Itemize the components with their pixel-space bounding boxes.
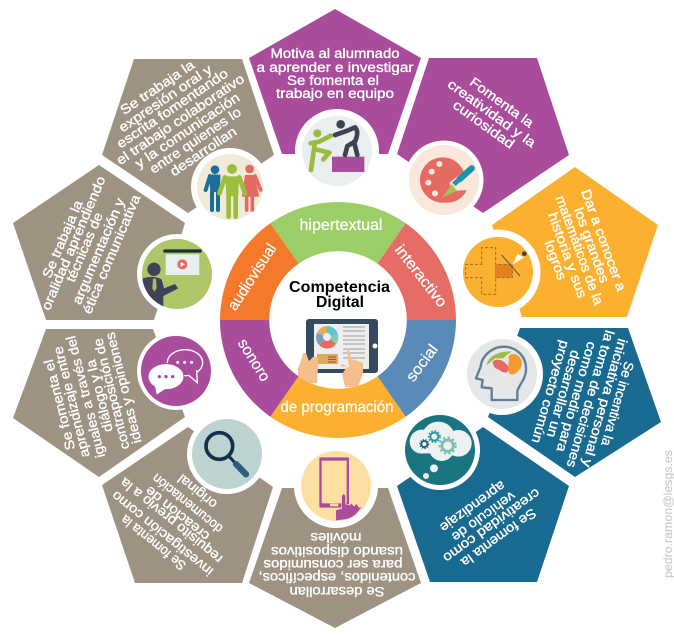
panel: matemáticos: matemáticos de la [553,194,606,307]
ring: digital dimensions: social [403,341,442,385]
panel: aprendizaje entre iguales: aprendizaje entre [50,345,93,459]
panel: matemáticos: los grandes [571,205,612,285]
icon: helping hand [295,109,379,193]
panel: investigación: documentación [149,471,225,537]
heading: Competencia Digital: Digital [316,294,364,311]
panel: creatividad aprendizaje: vehículo de [449,488,518,545]
panel: motiva al alumnado: Motiva al alumnado [270,46,400,61]
ring: digital dimensions: de programación [280,399,394,416]
panel: creatividad aprendizaje: creatividad como [440,485,543,566]
panel: oralidad: oralidad aprendiendo [38,174,108,312]
panel: iniciativa personal: iniciativa personal y [579,337,630,469]
panel: aprendizaje entre iguales: diálogo y la [83,358,116,434]
panel: oralidad [13,165,185,320]
panel: aprendizaje entre iguales: ideas y opiniones [102,330,145,445]
panel: iniciativa personal [488,328,661,477]
panel: aprendizaje entre iguales: contraposición de [90,337,133,451]
ring: digital dimensions: interactivo [391,242,450,311]
panel: matemáticos: Dar a conocer a [578,187,629,294]
icon: head with brain [461,333,543,415]
panel: motiva al alumnado [249,9,421,154]
panel: dispositivos móviles: para ser consumidos [263,557,402,572]
icon: tablet with hands [298,319,378,387]
panel: iniciativa personal: como medio para [553,340,599,454]
panel: creatividad y curiosidad: curiosidad [450,97,517,152]
panel: iniciativa personal: desarrollar un [544,349,583,439]
panel: iniciativa personal: proyecto común [529,339,572,445]
panel: dispositivos móviles: Se desarrollan [289,584,385,599]
ring: digital dimensions: audiovisual [225,241,280,314]
panel: oralidad: técnicas de [63,210,106,284]
icon: chat bubbles [137,332,215,410]
panel: creatividad aprendizaje [397,427,569,582]
panel: dispositivos móviles: contenidos, específicos, [258,570,416,585]
panel: investigación: original [175,471,220,512]
heading: Competencia Digital [289,279,390,311]
panel: iniciativa personal: la toma de decisiones [564,329,617,469]
panel: creatividad aprendizaje: Se fomenta la [458,505,539,570]
icon: presenter with screen [137,234,212,309]
ring: digital dimensions: hipertextual [300,217,382,234]
icon: palette [404,140,484,220]
panel: expresión oral y escrita: entre quienes lo [147,104,244,177]
panel: oralidad: Se trabaja la [39,198,86,280]
panel: motiva al alumnado: Se fomenta el [287,73,379,88]
panel: investigación: requisito previo a la [117,474,225,566]
icon: three people [191,148,269,226]
panel: expresión oral y escrita: expresión oral y [116,62,215,135]
panel: expresión oral y escrita: y la comunicación [132,90,242,171]
panel: investigación: creación de [142,483,212,544]
panel: motiva al alumnado: trabajo en equipo [276,86,394,101]
panel: investigación: Se fomenta la [118,512,189,573]
panel: oralidad: argumentación y [69,196,128,307]
panel: dispositivos móviles: móviles [310,530,362,545]
panel: matemáticos: historia y sus [545,210,590,300]
icon: magnifying glass [187,414,267,494]
panel: aprendizaje entre iguales [13,329,185,477]
panel: investigación: investigación como [109,488,216,579]
ring: digital dimensions [220,202,456,438]
panel: expresión oral y escrita [102,57,274,213]
panel: expresión oral y escrita: desarrollan [167,124,239,179]
icon: geometric construction [456,230,540,314]
ring: digital dimensions: sonoro [234,336,273,385]
panel: creatividad y curiosidad: creatividad y la [445,76,539,151]
panel: expresión oral y escrita: el trabajo colaborativo [113,71,247,168]
panel: investigación [102,427,273,583]
panel: dispositivos móviles: usando dispositivos [271,544,403,559]
panel: creatividad y curiosidad [397,58,569,213]
panel: creatividad aprendizaje: aprendizaje [437,478,508,535]
panel: motiva al alumnado: a aprender e investigar [256,60,414,75]
icon: smartphone and hand [294,444,378,528]
panel: matemáticos: logros [541,238,570,282]
panel: creatividad y curiosidad: Fomenta la [467,74,537,131]
panel: aprendizaje entre iguales: iguales a través del [63,334,108,459]
panel: iniciativa personal: Se incentiva la [598,360,637,448]
heading: Competencia Digital: Competencia [289,279,390,296]
panel: dispositivos móviles [249,488,421,628]
panel: expresión oral y escrita: escrita fomentando [114,66,231,151]
panel: oralidad: ética comunicativa [80,192,144,316]
icon: thought cloud with gears [400,410,480,490]
panel: expresión oral y escrita: Se trabaja la [117,57,198,118]
panel: aprendizaje entre iguales: Se fomenta el [41,358,78,452]
panel: matemáticos [492,167,658,317]
